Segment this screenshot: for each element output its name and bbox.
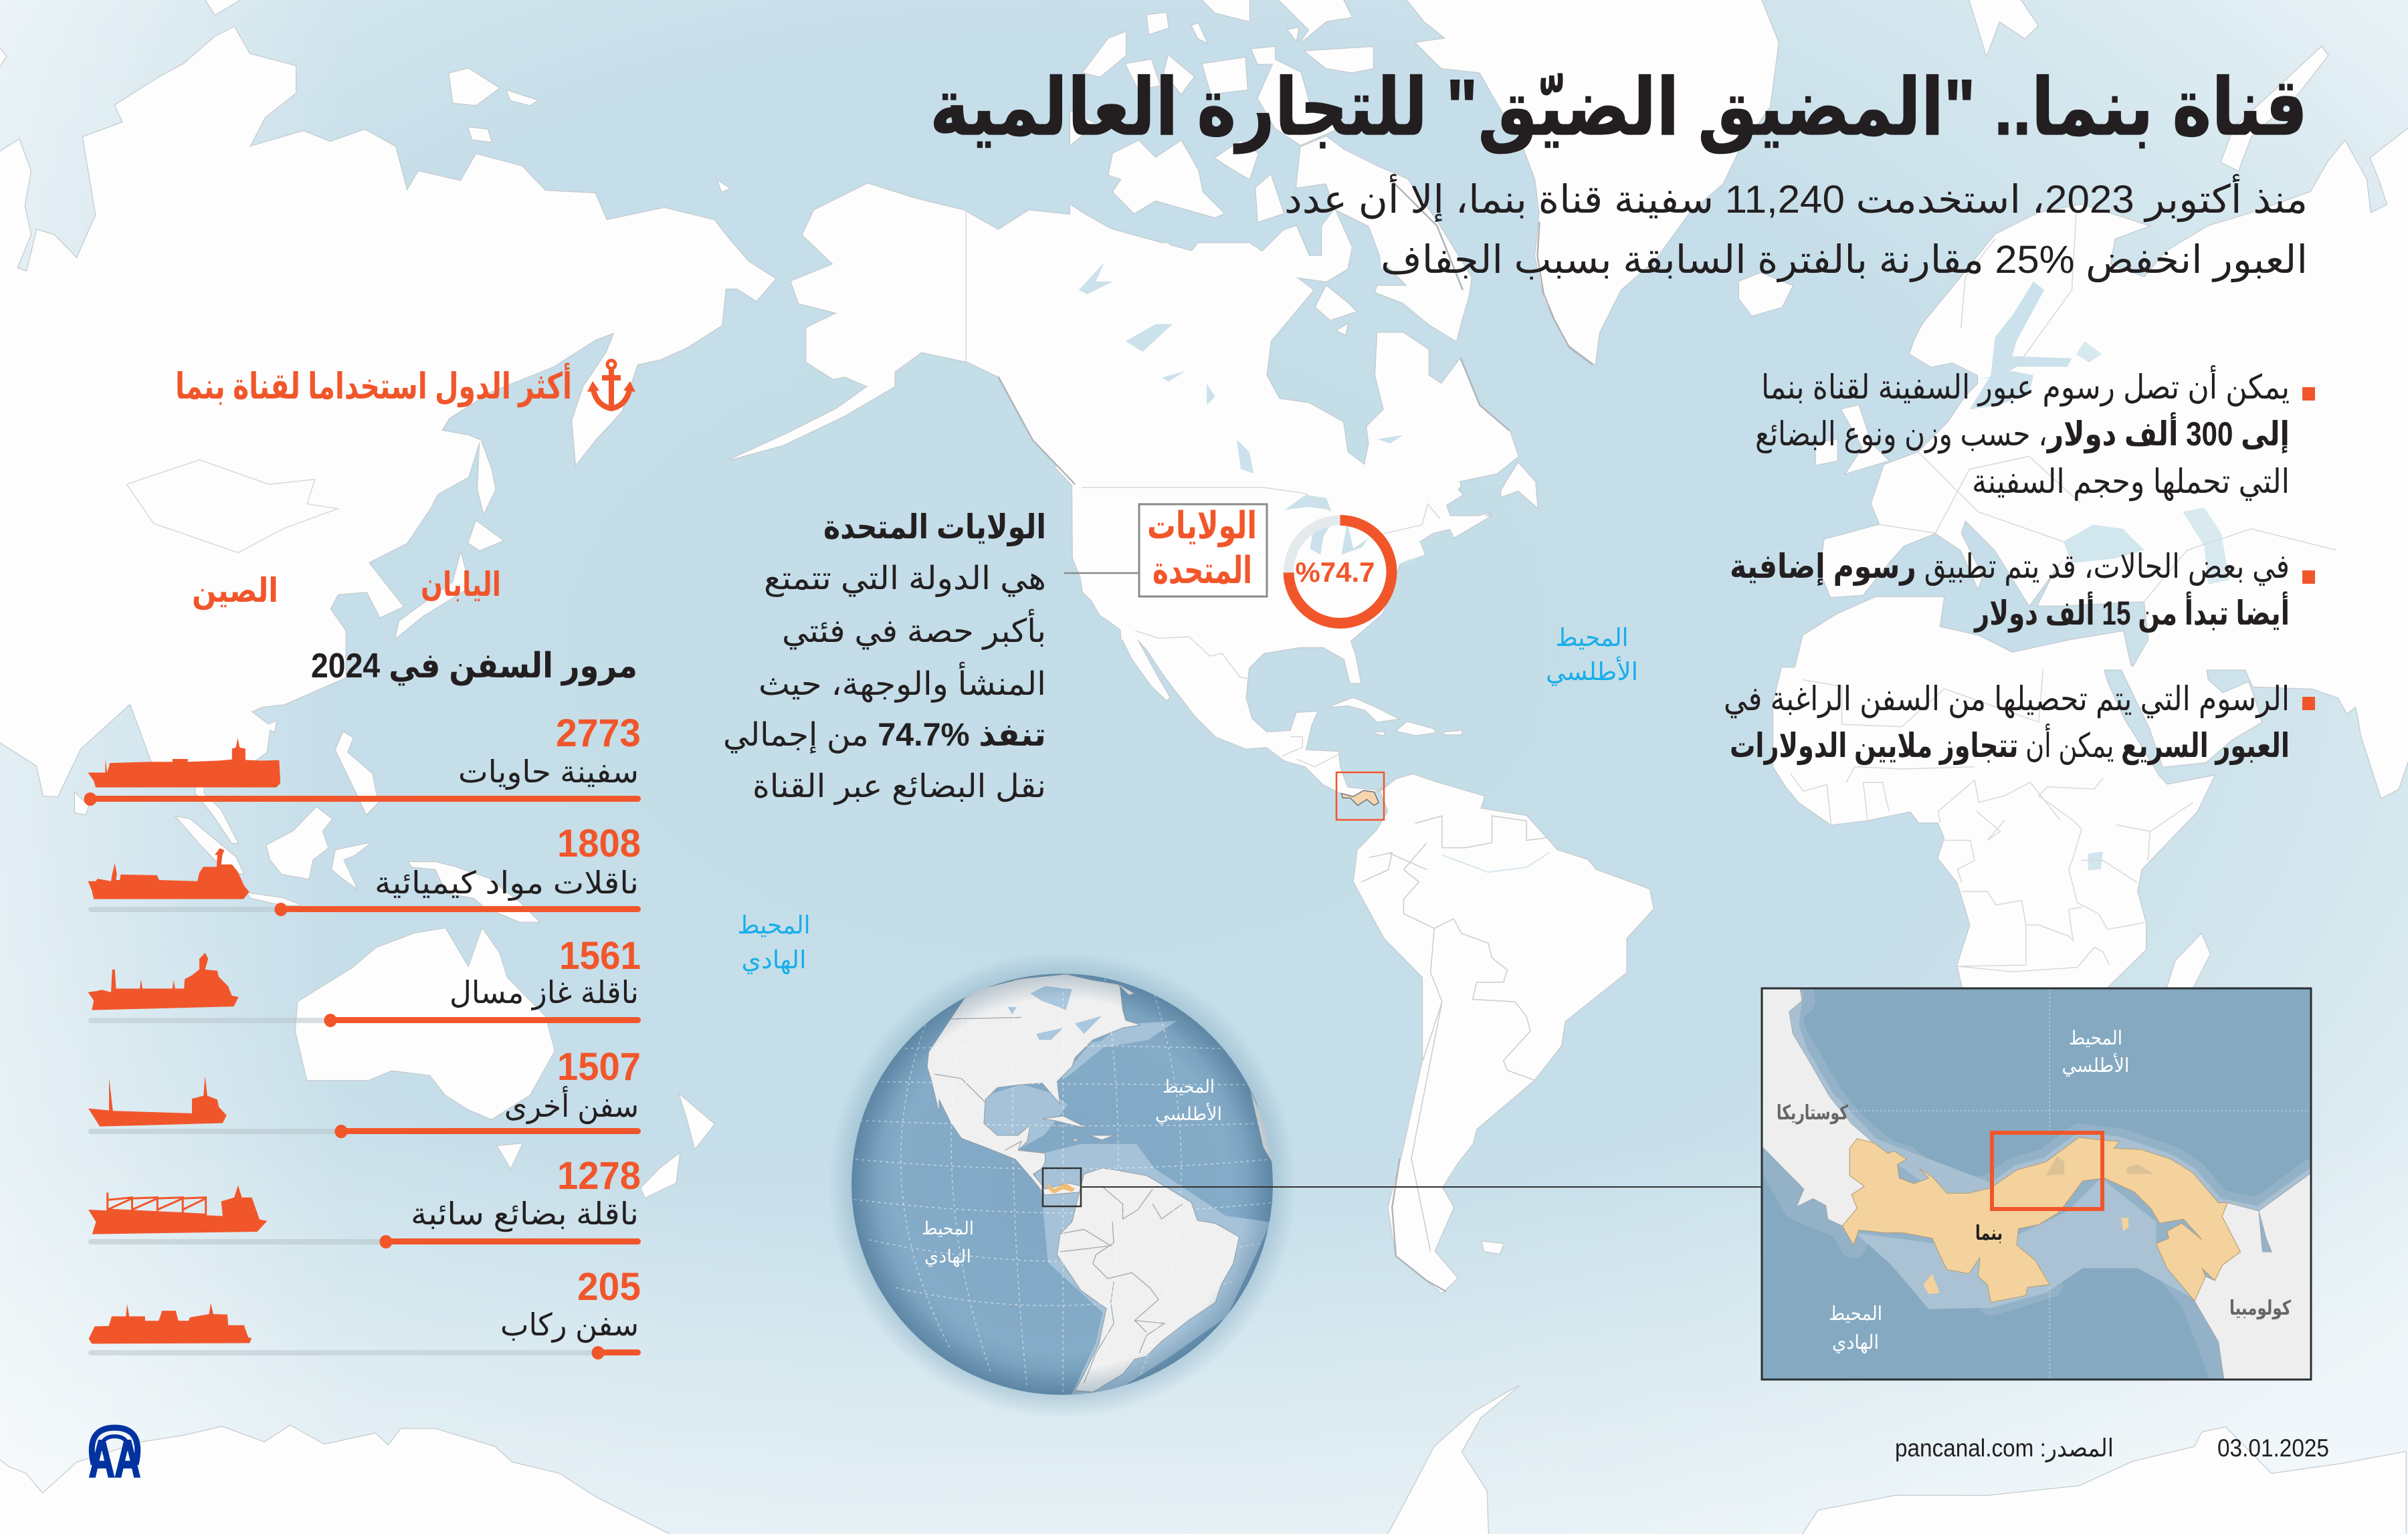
label: Atlantic Ocean: المحيط [1556, 624, 1628, 651]
inset label: Panama: بنما [1975, 1222, 2003, 1244]
inset label: Costa Rica: كوستاريكا [1777, 1102, 1848, 1124]
icon: AA logo [89, 1428, 140, 1488]
label box: United States: المتحدة [1152, 549, 1252, 591]
text block: United States: الولايات المتحدة [823, 508, 1046, 547]
connector line to inset [1081, 1186, 1762, 1188]
inset label: Atlantic: المحيط [2069, 1028, 2122, 1049]
label: China: الصين [192, 572, 278, 611]
row: passenger ships: سفن ركاب [500, 1307, 639, 1343]
icon: anchor [587, 360, 635, 409]
row: container ships: 2773 [556, 711, 641, 755]
bullet 1 [1755, 365, 2315, 502]
row: LNG tankers: 1561 [559, 934, 641, 978]
text block: United States: المنشأ والوجهة، حيث [759, 661, 1046, 703]
label box: United States [1064, 504, 1267, 596]
text block: United States [723, 508, 1046, 805]
locator: Panama on world map [1336, 772, 1384, 820]
inset map: Panama [1762, 988, 2311, 1380]
icon: AA logo: AA [89, 1429, 140, 1488]
bullet 1: التي تحملها وحجم السفينة [1972, 463, 2290, 502]
text block: United States: تنفذ %74.7 من إجمالي [723, 718, 1046, 754]
globe label: Pacific [922, 1218, 974, 1267]
inset highlight box [1992, 1133, 2102, 1209]
locator box on globe [1043, 1168, 1081, 1206]
globe label: Pacific: الهادي [924, 1246, 971, 1267]
row: bulk carriers: 1278 [557, 1154, 641, 1198]
subtitle [1284, 174, 2308, 283]
row: bulk carriers: ناقلة بضائع سائبة [411, 1196, 639, 1232]
inset label: Colombia: كولومبيا [2229, 1297, 2291, 1319]
row: chemical tankers: 1808 [557, 822, 641, 865]
date: 03.01.2025 [2217, 1434, 2329, 1462]
globe [828, 950, 1296, 1418]
bullet 3 [1724, 680, 2315, 766]
panel: ship transits chart [84, 711, 641, 1359]
bullet 2: في بعض الحالات، قد يتم تطبيق رسوم إضافية [1730, 548, 2290, 586]
text block: United States: بأكبر حصة في فئتي [782, 609, 1046, 650]
row: container ships: سفينة حاويات [458, 754, 639, 790]
inset label: Pacific [1829, 1303, 1882, 1353]
inset label: Atlantic [2062, 1028, 2130, 1077]
inset label: Pacific: المحيط [1829, 1303, 1882, 1325]
globe label: Atlantic: المحيط [1163, 1077, 1215, 1097]
inset label: Atlantic: الأطلسي [2062, 1053, 2130, 1077]
text block: United States: هي الدولة التي تتمتع [764, 561, 1046, 597]
heading: ship transits: مرور السفن في 2024 [311, 647, 637, 686]
row: chemical tankers: ناقلات مواد كيميائية [375, 865, 639, 901]
text block: United States: نقل البضائع عبر القناة [752, 769, 1046, 805]
row: passenger ships [88, 1265, 641, 1359]
bullet list: canal fees [1724, 365, 2315, 766]
donut chart: 74.7%: %74.7 [1295, 556, 1375, 588]
label: Pacific Ocean [737, 911, 811, 974]
row: container ships [84, 711, 641, 806]
row: other ships [88, 1045, 641, 1138]
inset label: Pacific: الهادي [1832, 1332, 1879, 1353]
bullet 3: الرسوم التي يتم تحصيلها من السفن الراغبة في [1724, 680, 2290, 719]
row: LNG tankers [88, 934, 641, 1027]
row: LNG tankers: ناقلة غاز مسال [449, 975, 639, 1010]
heading: top users: أكثر الدول استخداما لقناة بنما [175, 362, 572, 407]
globe label: Atlantic: الأطلسي [1155, 1102, 1222, 1125]
row: bulk carriers [88, 1154, 641, 1248]
globe label: Atlantic [1155, 1077, 1222, 1125]
row: chemical tankers [88, 822, 641, 916]
bullet 2 [1730, 548, 2315, 633]
label: Atlantic Ocean: الأطلسي [1546, 656, 1638, 686]
label box: United States: الولايات [1147, 504, 1257, 548]
globe label: Pacific: المحيط [922, 1218, 974, 1238]
label: Japan: اليابان [421, 566, 501, 603]
subtitle: العبور انخفض %25 مقارنة بالفترة السابقة بسبب الجفاف [1381, 238, 2308, 283]
label: Pacific Ocean: المحيط [737, 911, 811, 939]
donut chart: 74.7% [1288, 520, 1391, 623]
row: passenger ships: 205 [577, 1265, 641, 1309]
label: Atlantic Ocean [1546, 624, 1638, 686]
label: Pacific Ocean: الهادي [741, 946, 807, 974]
bullet 2: أيضا تبدأ من 15 ألف دولار [1973, 591, 2290, 633]
source: المصدر: pancanal.com [1895, 1434, 2114, 1462]
row: other ships: سفن أخرى [504, 1086, 639, 1125]
subtitle: منذ أكتوبر 2023، استخدمت 11,240 سفينة قناة بنما، إلا أن عدد [1284, 174, 2308, 223]
row: other ships: 1507 [557, 1045, 641, 1089]
bullet 3: العبور السريع يمكن أن تتجاوز ملايين الدولارات [1730, 724, 2290, 766]
bullet 1: يمكن أن تصل رسوم عبور السفينة لقناة بنما [1761, 365, 2290, 407]
bullet 1: إلى 300 ألف دولار، حسب وزن ونوع البضائع [1755, 412, 2290, 454]
